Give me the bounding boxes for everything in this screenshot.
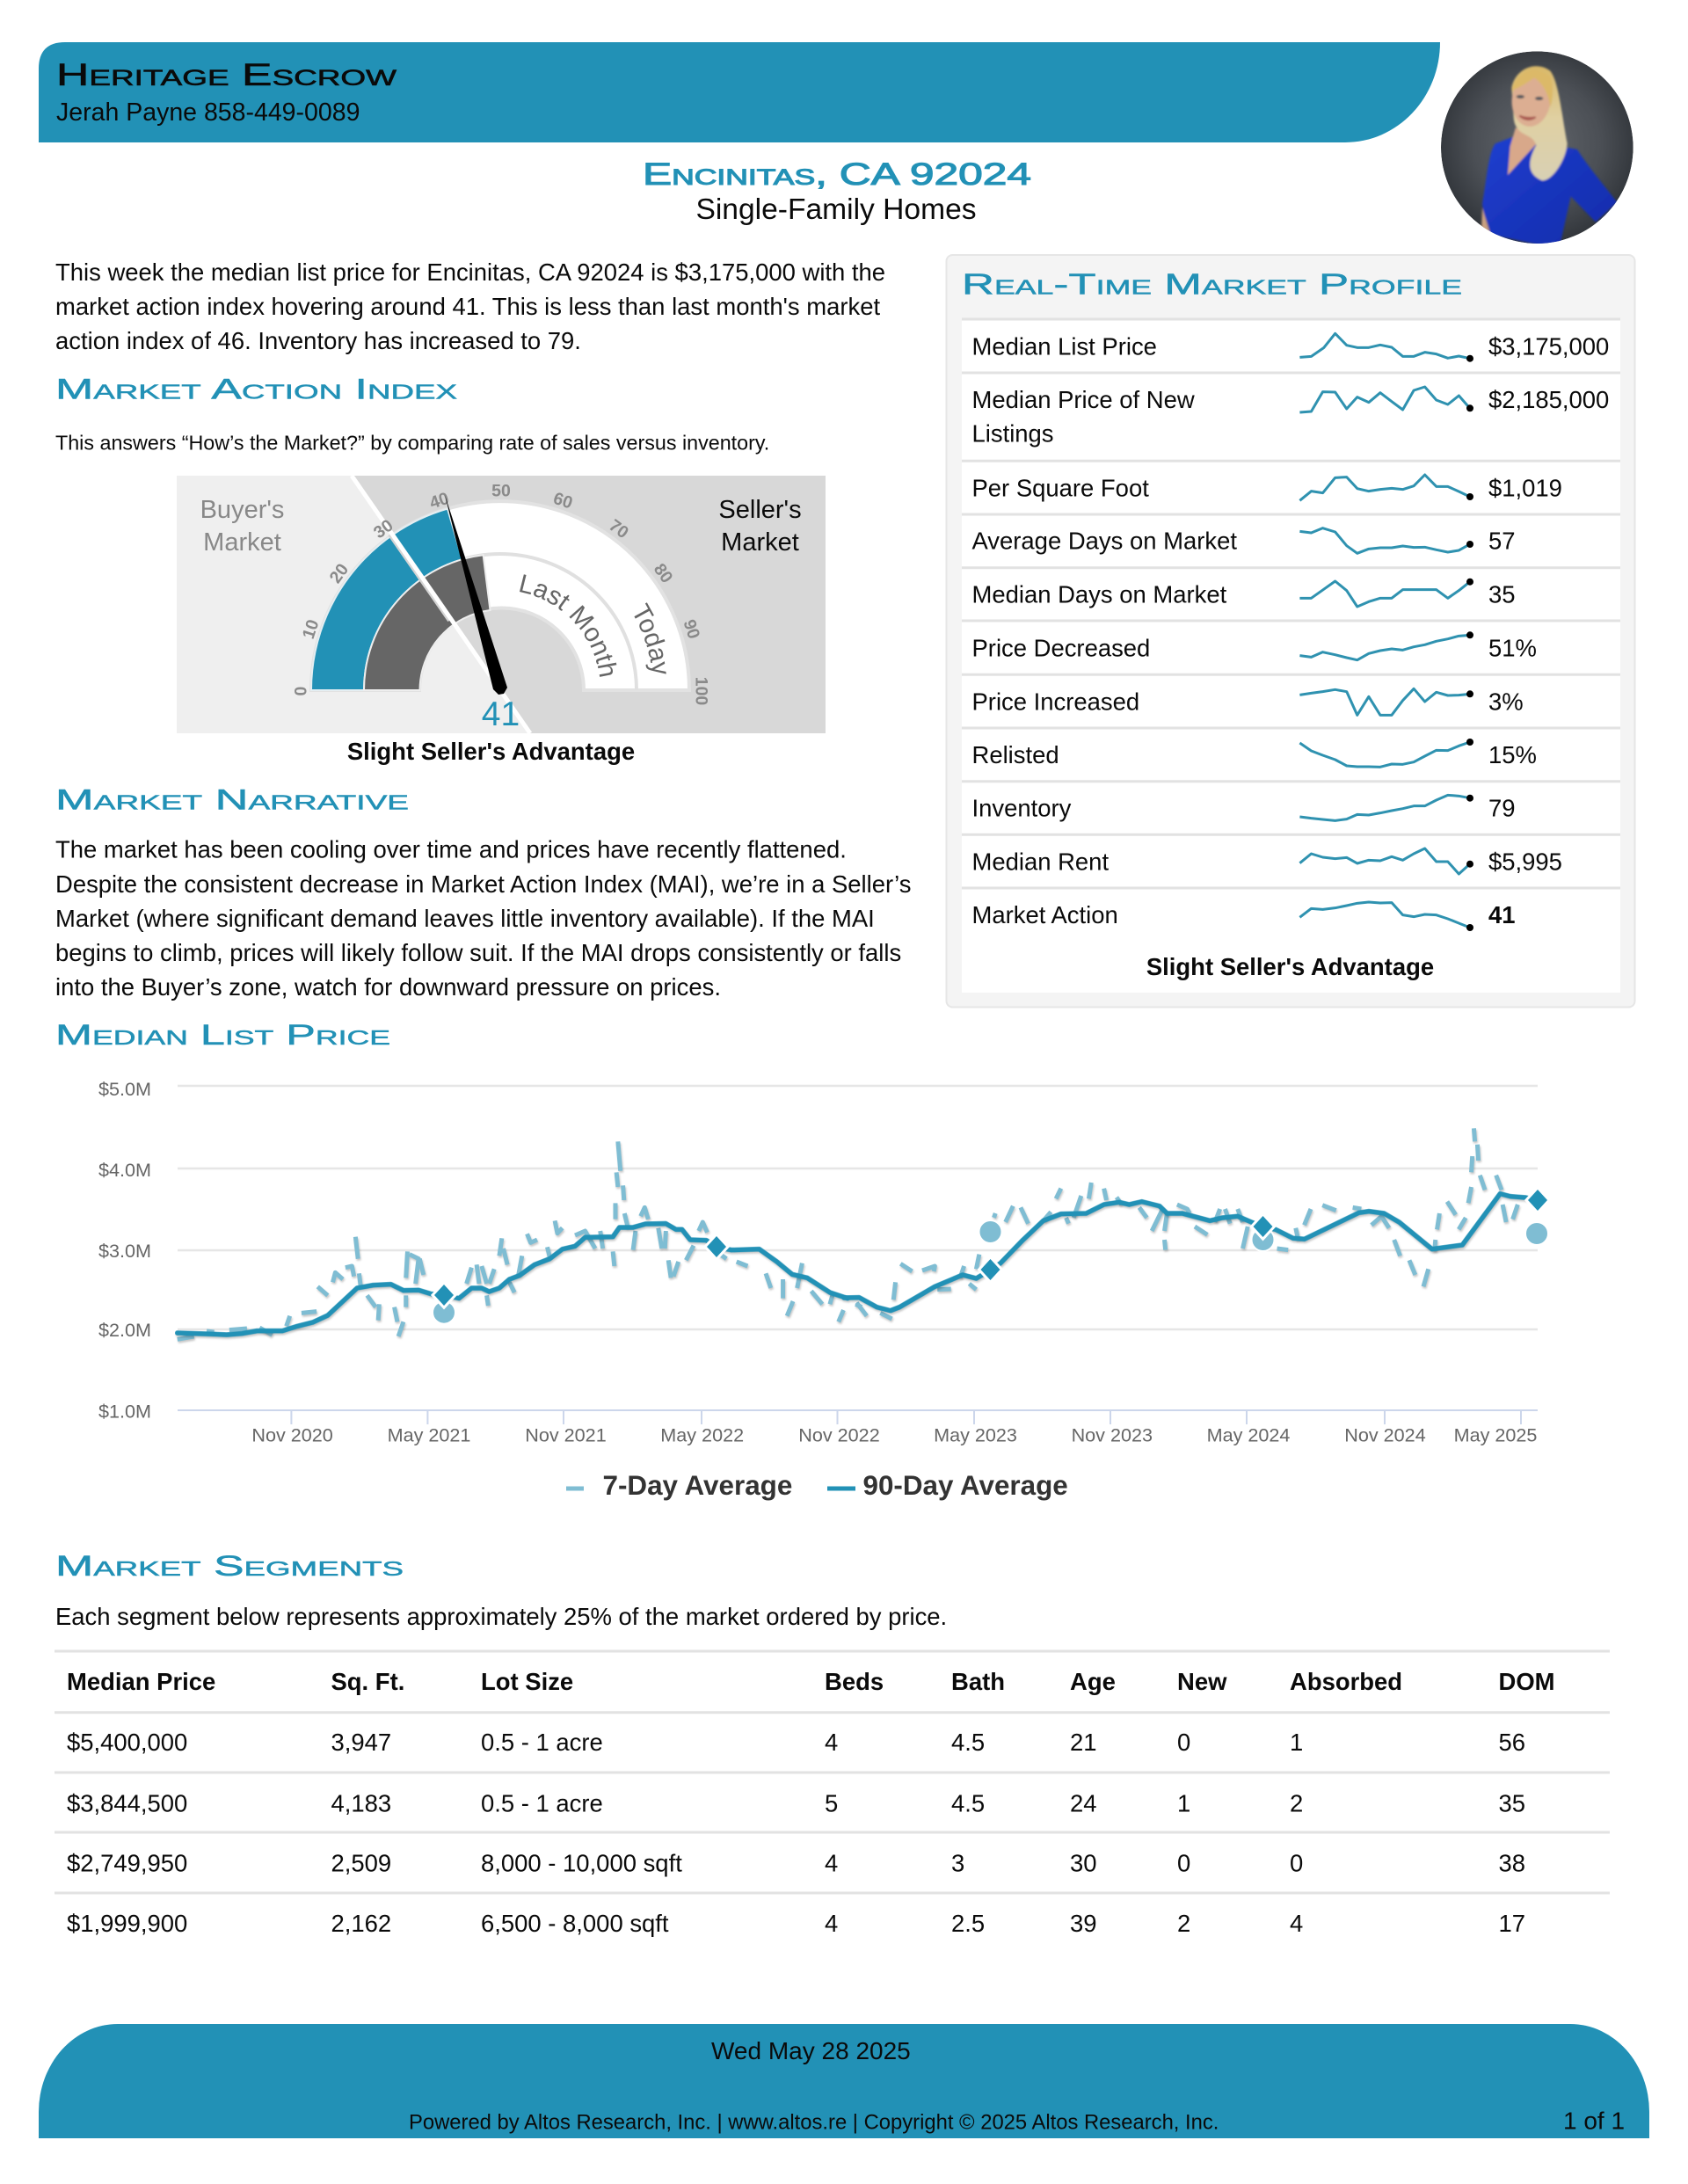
narrative paragraph: [55, 835, 911, 1001]
footer banner: [39, 2024, 1649, 2138]
gauge tick labels: 50: [491, 482, 511, 501]
profile row labels: Median Rent: [972, 848, 1109, 876]
table row 2: 4,183: [331, 1790, 391, 1816]
profile row values: 57: [1488, 527, 1516, 554]
profile row labels: Price Increased: [972, 688, 1139, 715]
header banner: [39, 42, 1440, 142]
intro paragraph: This week the median list price for Encinitas, CA 92024 is $3,175,000 with the: [55, 258, 885, 286]
sellers market label: Seller's: [718, 496, 802, 524]
x axis labels: Nov 2021: [525, 1423, 607, 1445]
gauge chart: [177, 476, 826, 733]
gauge tick labels: [292, 482, 710, 705]
copyright: Powered by Altos Research, Inc. | www.altos.re | Copyright © 2025 Altos Research, Inc.: [409, 2111, 1219, 2135]
table row 2: 24: [1070, 1790, 1097, 1816]
today label: Today: [635, 602, 666, 674]
gauge tick labels: 20: [326, 560, 353, 587]
narrative paragraph: Market (where significant demand leaves little inventory available). If the MAI: [55, 905, 875, 932]
chart legend: 7-Day Average: [603, 1470, 792, 1501]
profile row values: $5,995: [1488, 848, 1562, 876]
profile row labels: Median Days on Market: [972, 580, 1227, 608]
profile row values: 51%: [1488, 635, 1537, 662]
y axis labels: $1.0M: [98, 1401, 151, 1423]
segments description: Each segment below represents approximately 25% of the market ordered by price.: [55, 1603, 947, 1630]
table row 4: 2: [1177, 1910, 1190, 1937]
table row 2: [67, 1790, 1525, 1816]
7-day average series: [178, 1128, 1517, 1339]
profile heading: Real-Time Market Profile: [962, 267, 1462, 301]
profile row values: 41: [1488, 901, 1516, 928]
table row 3: [67, 1850, 1525, 1876]
table header: Beds: [825, 1668, 884, 1695]
x axis labels: Nov 2023: [1072, 1423, 1153, 1445]
table row 1: $5,400,000: [67, 1729, 187, 1756]
profile row values: [1488, 332, 1609, 928]
profile row labels: Average Days on Market: [972, 527, 1237, 554]
90-day average series: [178, 1194, 1538, 1335]
chart legend: 90-Day Average: [863, 1470, 1068, 1501]
profile row labels: Median Price of New: [972, 386, 1195, 413]
x axis labels: Nov 2020: [251, 1423, 333, 1445]
table row 4: 17: [1498, 1910, 1525, 1937]
profile row labels: Market Action: [972, 901, 1118, 928]
table row 3: 0: [1177, 1850, 1190, 1876]
heading: market segments: Market Segments: [55, 1550, 404, 1582]
x axis labels: May 2021: [388, 1423, 470, 1445]
report title: [643, 157, 1031, 226]
table header: Age: [1070, 1668, 1116, 1695]
table row 4: $1,999,900: [67, 1910, 187, 1937]
profile row labels: Relisted: [972, 741, 1059, 768]
profile row labels: Listings: [972, 420, 1054, 448]
table row 1: 0.5 - 1 acre: [481, 1729, 603, 1756]
table row 4: 2,162: [331, 1910, 391, 1937]
x axis labels: May 2022: [660, 1423, 744, 1445]
gauge tick labels: 10: [299, 617, 323, 641]
y axis labels: $3.0M: [98, 1240, 151, 1262]
table row 1: [67, 1729, 1525, 1756]
table header: Sq. Ft.: [331, 1668, 404, 1695]
y axis labels: $2.0M: [98, 1319, 151, 1341]
gauge tick labels: 30: [370, 516, 397, 542]
table row 3: 30: [1070, 1850, 1097, 1876]
gauge tick labels: 100: [691, 677, 710, 705]
profile row labels: Price Decreased: [972, 635, 1150, 662]
table row 4: 4: [1290, 1910, 1303, 1937]
table header: Median Price: [67, 1668, 215, 1695]
heading: market action index: Market Action Index: [55, 373, 457, 404]
panel: real-time market profile: [946, 255, 1635, 1008]
table row 3: 3: [951, 1850, 964, 1876]
x axis labels: May 2025: [1454, 1423, 1537, 1445]
table row 1: 21: [1070, 1729, 1097, 1756]
profile row labels: Median List Price: [972, 332, 1157, 360]
table row 3: 4: [825, 1850, 838, 1876]
table row 1: 4: [825, 1729, 838, 1756]
table row 4: [67, 1910, 1525, 1937]
gauge tick labels: 60: [551, 489, 575, 513]
table: market segments: [55, 1651, 1610, 1937]
profile row labels: Inventory: [972, 794, 1072, 821]
table row 1: 56: [1498, 1729, 1525, 1756]
table header: Bath: [951, 1668, 1005, 1695]
profile row values: 3%: [1488, 688, 1524, 715]
agent contact: Jerah Payne 858-449-0089: [56, 98, 360, 127]
x axis labels: May 2023: [934, 1423, 1017, 1445]
table row 3: 2,509: [331, 1850, 391, 1876]
subtitle: Single-Family Homes: [695, 193, 977, 226]
gauge tick labels: 0: [292, 686, 311, 695]
narrative paragraph: begins to climb, prices will likely follow suit. If the MAI drops consistently or falls: [55, 939, 901, 966]
narrative paragraph: into the Buyer’s zone, watch for downward pressure on prices.: [55, 973, 721, 1001]
x axis labels: Nov 2022: [798, 1423, 880, 1445]
table header: Lot Size: [481, 1668, 573, 1695]
line chart: median list price: [98, 1078, 1548, 1445]
x axis labels: May 2024: [1207, 1423, 1290, 1445]
buyers market label: Market: [203, 528, 281, 557]
x axis labels: [251, 1423, 1537, 1445]
chart legend: [566, 1470, 1068, 1501]
intro paragraph: [55, 258, 885, 354]
table row 2: 35: [1498, 1790, 1525, 1816]
table row 3: 0: [1290, 1850, 1303, 1876]
table row 4: 2.5: [951, 1910, 985, 1937]
table row 3: 8,000 - 10,000 sqft: [481, 1850, 682, 1876]
gauge caption: Slight Seller's Advantage: [347, 738, 635, 765]
y axis labels: [98, 1078, 151, 1423]
table row 1: 1: [1290, 1729, 1303, 1756]
table row 2: 5: [825, 1790, 838, 1816]
report date: Wed May 28 2025: [711, 2037, 911, 2064]
table row 4: 6,500 - 8,000 sqft: [481, 1910, 669, 1937]
profile row values: $3,175,000: [1488, 332, 1609, 360]
table row 1: 0: [1177, 1729, 1190, 1756]
table row 4: 4: [825, 1910, 838, 1937]
profile row values: 35: [1488, 580, 1516, 608]
intro paragraph: market action index hovering around 41. This is less than last month's market: [55, 293, 880, 320]
y axis labels: $4.0M: [98, 1159, 151, 1181]
table header: New: [1177, 1668, 1227, 1695]
sellers market label: Market: [721, 528, 799, 557]
gauge tick labels: 40: [427, 489, 452, 513]
90-day markers: [434, 1190, 1547, 1306]
table row 2: $3,844,500: [67, 1790, 187, 1816]
table row 2: 1: [1177, 1790, 1190, 1816]
last month arc: [364, 555, 491, 690]
x axis labels: Nov 2024: [1344, 1423, 1426, 1445]
profile row values: 79: [1488, 794, 1516, 821]
table row 4: 39: [1070, 1910, 1097, 1937]
profile row labels: Per Square Foot: [972, 474, 1149, 501]
sparklines: [1299, 333, 1473, 931]
table header: DOM: [1498, 1668, 1555, 1695]
profile caption: Slight Seller's Advantage: [1146, 953, 1434, 980]
gauge tick labels: 80: [650, 560, 676, 587]
table row 3: $2,749,950: [67, 1850, 187, 1876]
gauge value: 41: [482, 695, 520, 733]
needle: [445, 495, 507, 695]
profile row values: $2,185,000: [1488, 386, 1609, 413]
today arc: [311, 509, 462, 690]
profile row values: $1,019: [1488, 474, 1562, 501]
page number: 1 of 1: [1563, 2108, 1625, 2135]
table row 1: 4.5: [951, 1729, 985, 1756]
profile row labels: [972, 332, 1237, 928]
company name: Heritage Escrow: [56, 58, 397, 92]
7-day markers: [433, 1220, 1548, 1324]
gauge tick labels: 70: [605, 516, 632, 542]
table row 2: 0.5 - 1 acre: [481, 1790, 603, 1816]
table row 3: 38: [1498, 1850, 1525, 1876]
table header: Absorbed: [1290, 1668, 1402, 1695]
heading: market narrative: Market Narrative: [55, 784, 409, 816]
table row 1: 3,947: [331, 1729, 391, 1756]
market action description: This answers “How’s the Market?” by comparing rate of sales versus inventory.: [55, 431, 769, 454]
report title: Encinitas, CA 92024: [643, 157, 1031, 192]
narrative paragraph: The market has been cooling over time and prices have recently flattened.: [55, 835, 847, 863]
gauge tick labels: 90: [680, 617, 703, 642]
agent photo: [1441, 51, 1633, 249]
y axis labels: $5.0M: [98, 1078, 151, 1100]
table row 2: 4.5: [951, 1790, 985, 1816]
table row 2: 2: [1290, 1790, 1303, 1816]
last month label: Last Month: [520, 574, 617, 677]
profile row values: 15%: [1488, 741, 1537, 768]
buyers market label: Buyer's: [200, 496, 284, 524]
narrative paragraph: Despite the consistent decrease in Market Action Index (MAI), we’re in a Seller’s: [55, 870, 911, 898]
intro paragraph: action index of 46. Inventory has increased to 79.: [55, 327, 581, 354]
table header: [67, 1668, 1555, 1695]
heading: median list price: Median List Price: [55, 1019, 390, 1051]
